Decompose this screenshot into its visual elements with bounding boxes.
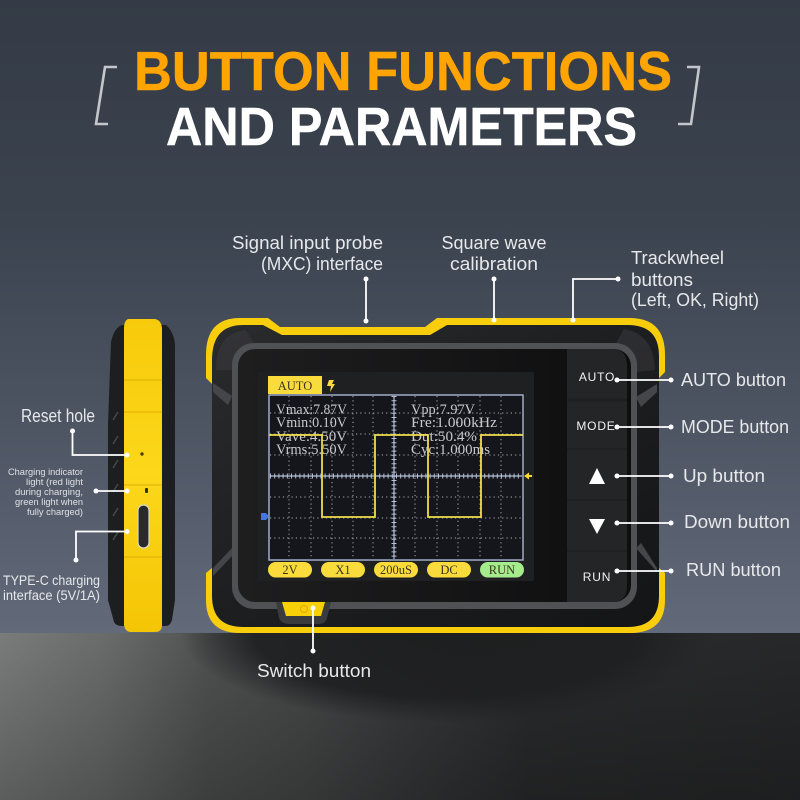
trigger level marker bbox=[524, 472, 532, 480]
button panel bbox=[567, 349, 627, 602]
callout: charging indicator: fully charged) bbox=[27, 507, 83, 518]
side grip ridges bbox=[113, 412, 118, 540]
callout: trackwheel buttons bbox=[570, 248, 759, 322]
callout: signal input probe: Signal input probe bbox=[232, 233, 383, 253]
AUTO tab: AUTO bbox=[278, 379, 312, 393]
background wall bbox=[0, 0, 800, 633]
gray bezel bbox=[232, 343, 637, 609]
callout: charging indicator: green light when bbox=[15, 497, 83, 508]
callout: square wave calibration: calibration bbox=[450, 254, 538, 274]
callout: square wave calibration: Square wave bbox=[442, 233, 546, 253]
yellow frame bbox=[206, 318, 665, 633]
measurement readouts right: Cyc:1.000ms bbox=[411, 442, 490, 458]
bottom pills bbox=[268, 562, 524, 578]
bottom pills: 200uS bbox=[380, 563, 412, 577]
callout: down button: Down button bbox=[684, 512, 790, 532]
measurement readouts left: Vrms:5.50V bbox=[276, 442, 347, 458]
inner black face bbox=[238, 349, 631, 602]
bottom pills: DC bbox=[440, 563, 458, 577]
measurement readouts left bbox=[276, 402, 347, 458]
measurement readouts left: Vmin:0.10V bbox=[276, 415, 347, 431]
bottom pills: RUN bbox=[489, 563, 515, 577]
callout: reset hole bbox=[21, 406, 130, 458]
scope plot area bbox=[269, 395, 523, 560]
bottom pills: X1 bbox=[335, 563, 351, 577]
left bracket bbox=[96, 67, 117, 124]
grid bbox=[270, 396, 522, 559]
trigger icon bbox=[327, 380, 335, 392]
black body bbox=[212, 325, 659, 627]
title line one: BUTTON FUNCTIONS bbox=[134, 40, 672, 102]
square wave trace bbox=[269, 435, 523, 517]
main device bbox=[206, 318, 665, 633]
callout: RUN button: RUN button bbox=[686, 560, 781, 580]
indicator light bbox=[145, 488, 148, 493]
title bbox=[96, 40, 699, 157]
MODE key: MODE bbox=[576, 419, 616, 433]
callout: MODE button: MODE button bbox=[681, 417, 789, 437]
AUTO key: AUTO bbox=[579, 370, 615, 384]
callout: reset hole: Reset hole bbox=[21, 406, 95, 426]
AUTO tab bbox=[268, 376, 322, 394]
callout: square wave calibration bbox=[442, 233, 546, 322]
callout: AUTO button: AUTO button bbox=[681, 370, 786, 390]
channel marker bbox=[261, 513, 269, 520]
measurement readouts right: Dut:50.4% bbox=[411, 429, 477, 445]
side yellow band bbox=[124, 319, 162, 632]
screen bbox=[258, 372, 534, 581]
measurement readouts right bbox=[411, 402, 497, 458]
callout: up button: Up button bbox=[683, 466, 765, 486]
side view of device bbox=[108, 319, 175, 632]
centre axes bbox=[270, 396, 522, 559]
callout: charging indicator: light (red light bbox=[26, 477, 83, 488]
callout: trackwheel buttons: Trackwheel bbox=[631, 248, 724, 268]
callout: switch button bbox=[257, 606, 371, 681]
reset hole bbox=[140, 452, 144, 456]
callout: type-C charging bbox=[3, 529, 130, 603]
measurement readouts right: Fre:1.000kHz bbox=[411, 415, 497, 431]
callout: MODE button bbox=[614, 417, 789, 437]
side black housing bbox=[108, 325, 175, 626]
callout: type-C charging: TYPE-C charging bbox=[3, 572, 100, 588]
callout: AUTO button bbox=[614, 370, 786, 390]
callout: up button bbox=[614, 466, 765, 486]
callout: trackwheel buttons: buttons bbox=[631, 270, 693, 290]
bottom pills: 2V bbox=[282, 563, 298, 577]
callout: charging indicator: Charging indicator bbox=[8, 467, 83, 478]
floor bbox=[0, 543, 800, 800]
measurement readouts right: Vpp:7.97V bbox=[411, 402, 475, 418]
measurement readouts left: Vave:4.50V bbox=[276, 429, 347, 445]
RUN key: RUN bbox=[583, 570, 611, 584]
callout: signal input probe: (MXC) interface bbox=[261, 254, 383, 274]
callout: signal input probe bbox=[232, 233, 383, 324]
up triangle bbox=[589, 468, 605, 484]
callout: switch button: Switch button bbox=[257, 661, 371, 681]
callout: charging indicator bbox=[8, 467, 130, 518]
measurement readouts left: Vmax:7.87V bbox=[276, 402, 347, 418]
right bracket bbox=[678, 67, 699, 124]
callout: RUN button bbox=[614, 560, 781, 580]
callout: type-C charging: interface (5V/1A) bbox=[3, 587, 100, 603]
corner chamfers bbox=[216, 329, 655, 372]
callout: charging indicator: during charging, bbox=[15, 487, 83, 498]
down triangle bbox=[589, 519, 605, 534]
USB-C port bbox=[138, 505, 149, 548]
callout: down button bbox=[614, 512, 790, 532]
side notches bbox=[213, 383, 657, 576]
title line two: AND PARAMETERS bbox=[166, 97, 637, 157]
callout: trackwheel buttons: (Left, OK, Right) bbox=[631, 290, 759, 310]
power button bbox=[276, 602, 331, 624]
